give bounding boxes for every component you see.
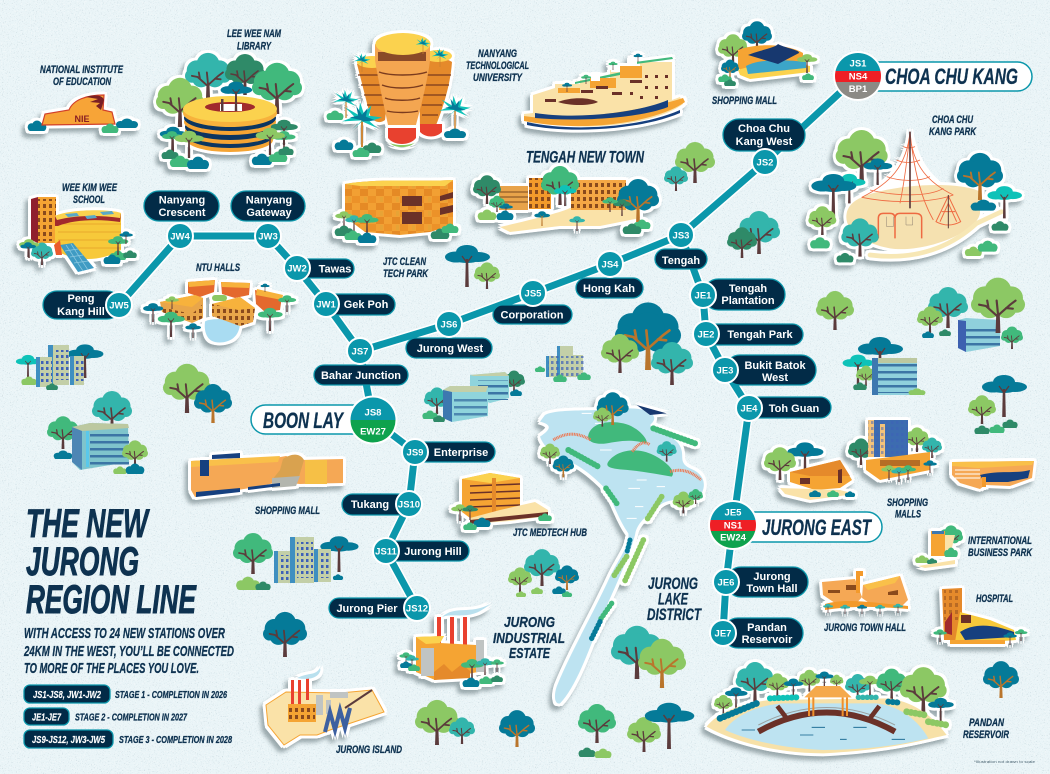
subtitle: TO MORE OF THE PLACES YOU LOVE. bbox=[24, 661, 199, 677]
station: JS9 Enterprise: Enterprise bbox=[434, 447, 488, 459]
label: JTC Clean Tech Park bbox=[383, 256, 429, 280]
building cluster: west bbox=[16, 344, 103, 390]
sticker: Wee Kim Wee School bbox=[19, 197, 137, 272]
station: JS2 Choa Chu Kang West bbox=[723, 119, 805, 175]
station: JW3 Nanyang Gateway: JW3 bbox=[258, 232, 278, 242]
legend: STAGE 2 - COMPLETION IN 2027 bbox=[75, 712, 188, 724]
station: JE2 Tengah Park: JE2 bbox=[698, 330, 714, 340]
station: JW3 Nanyang Gateway: Gateway bbox=[246, 207, 293, 219]
label: Hospital: HOSPITAL bbox=[976, 593, 1013, 605]
label: National Institute of Education: NATIONAL INSTITUTE bbox=[40, 64, 123, 76]
station: JS4 Hong Kah: JS4 bbox=[602, 260, 619, 270]
label: Nanyang Technological University: TECHNOLOGICAL bbox=[466, 60, 529, 72]
station: JS2 Choa Chu Kang West: JS2 bbox=[757, 158, 773, 168]
station: JS1 NS4 BP1 Choa Chu Kang interchange: NS4 bbox=[849, 72, 868, 82]
label: JTC MedTech Hub: JTC MEDTECH HUB bbox=[513, 527, 587, 539]
station: JE7 Pandan Reservoir bbox=[710, 618, 803, 648]
station: JS11 Jurong Hill: JS11 bbox=[375, 546, 398, 558]
station: JS9 Enterprise bbox=[402, 439, 495, 465]
sticker: Hospital bbox=[933, 588, 1027, 645]
station: JE2 Tengah Park bbox=[693, 321, 803, 347]
station: JS12 Jurong Pier bbox=[329, 595, 430, 621]
trees: west centre bbox=[163, 364, 232, 423]
station: JE4 Toh Guan: Toh Guan bbox=[769, 403, 820, 415]
station: JE3 Bukit Batok West: Bukit Batok bbox=[744, 360, 806, 372]
station: JE2 Tengah Park: Tengah Park bbox=[727, 329, 793, 341]
trees: north centre bbox=[445, 142, 780, 289]
sticker: Jurong Lake District lake bbox=[540, 392, 704, 704]
station: JS5 Corporation: JS5 bbox=[525, 288, 542, 300]
trees: large group near Tengah bbox=[601, 302, 693, 385]
station: JE1 Tengah Plantation: Plantation bbox=[721, 295, 775, 307]
building with trees: north east bbox=[917, 278, 1025, 352]
footnote: *Illustration not drawn to scale bbox=[974, 760, 1035, 764]
station: JS8 EW27 Boon Lay interchange: BOON LAY bbox=[263, 408, 345, 433]
station: JW1 Gek Poh: Gek Poh bbox=[344, 299, 389, 311]
label: Lee Wee Nam Library bbox=[227, 28, 282, 52]
legend: JS9-JS12, JW3-JW5 bbox=[32, 735, 105, 746]
label: Nanyang Technological University: NANYANG bbox=[478, 48, 517, 60]
station: JW2 Tawas bbox=[284, 255, 354, 281]
station: JW5 Peng Kang Hill: Peng bbox=[68, 293, 94, 305]
station: JW4 Nanyang Crescent: JW4 bbox=[170, 232, 190, 242]
sticker: Lee Wee Nam Library bbox=[156, 53, 302, 169]
label: NTU Halls: NTU HALLS bbox=[196, 262, 240, 274]
heading: Jurong Lake District: JURONG bbox=[648, 574, 698, 593]
station: JE3 Bukit Batok West bbox=[712, 355, 816, 385]
station: JE1 Tengah Plantation bbox=[690, 279, 785, 310]
sticker: shopping mall with tower bbox=[848, 420, 942, 482]
station: JE7 Pandan Reservoir: Reservoir bbox=[742, 634, 793, 646]
building with trees: lower west bbox=[47, 391, 148, 474]
trees: south centre bbox=[263, 612, 535, 747]
station: JW5 Peng Kang Hill bbox=[43, 291, 132, 319]
sticker: Nanyang Technological University hive bbox=[326, 33, 471, 157]
sticker: top shopping mall bbox=[718, 21, 817, 86]
heading: Jurong Lake District: DISTRICT bbox=[647, 605, 702, 624]
heading: Jurong Industrial Estate: ESTATE bbox=[509, 645, 551, 662]
sticker: International Business Park bbox=[915, 525, 963, 568]
label: Lee Wee Nam Library: LIBRARY bbox=[237, 40, 272, 52]
station: JE5 NS1 EW24 Jurong East interchange: EW24 bbox=[720, 532, 747, 544]
heading: Jurong Industrial Estate: JURONG bbox=[504, 614, 555, 631]
trees: east edge bbox=[968, 375, 1027, 434]
station: JE7 Pandan Reservoir: JE7 bbox=[715, 628, 731, 640]
station: JW2 Tawas: JW2 bbox=[287, 264, 307, 274]
label: Lee Wee Nam Library: LEE WEE NAM bbox=[227, 28, 282, 40]
station: JS10 Tukang: Tukang bbox=[351, 499, 389, 511]
label: Pandan Reservoir bbox=[963, 717, 1009, 741]
station: JE6 Jurong Town Hall: JE6 bbox=[718, 578, 734, 588]
station: JE1 Tengah Plantation: Tengah bbox=[729, 283, 767, 295]
legend: JS1-JS8, JW1-JW2 bbox=[33, 690, 101, 701]
building cluster: east of Jurong West bbox=[535, 346, 591, 382]
label: Choa Chu Kang Park: KANG PARK bbox=[929, 126, 977, 138]
station: JS2 Choa Chu Kang West: Kang West bbox=[736, 136, 793, 148]
label: JTC Clean Tech Park: JTC CLEAN bbox=[383, 256, 427, 268]
label: Wee Kim Wee School bbox=[62, 182, 117, 206]
station: JS10 Tukang bbox=[342, 491, 422, 517]
heading: Jurong Lake District bbox=[647, 574, 702, 624]
trees and building: east bbox=[816, 291, 926, 395]
station: JS1 NS4 BP1 Choa Chu Kang interchange: JS1 bbox=[850, 58, 867, 70]
label: Nanyang Technological University: UNIVERSITY bbox=[473, 72, 523, 84]
sticker: left shopping mall bbox=[191, 453, 343, 497]
sticker: Tengah New Town bbox=[473, 166, 659, 234]
label: left shopping mall: SHOPPING MALL bbox=[255, 505, 320, 517]
station: JW1 Gek Poh bbox=[313, 291, 395, 317]
title bbox=[26, 502, 197, 622]
sticker: National Institute of Education bbox=[28, 95, 138, 133]
station: JW5 Peng Kang Hill: JW5 bbox=[109, 300, 129, 312]
label: Nanyang Technological University bbox=[466, 48, 529, 84]
heading: Jurong Lake District: LAKE bbox=[658, 590, 688, 608]
sticker: JTC Clean Tech Park bbox=[335, 180, 458, 243]
label: Wee Kim Wee School: SCHOOL bbox=[73, 194, 105, 206]
rail lines bbox=[119, 76, 858, 633]
label: JTC Clean Tech Park: TECH PARK bbox=[383, 268, 429, 280]
station: JS8 EW27 Boon Lay interchange: JS8 bbox=[365, 408, 381, 418]
heading: Tengah New Town: TENGAH NEW TOWN bbox=[526, 148, 644, 166]
label: National Institute of Education bbox=[40, 64, 123, 88]
sticker: National Institute of Education: NIE bbox=[74, 114, 90, 124]
station: JS11 Jurong Hill: Jurong Hill bbox=[404, 546, 462, 558]
station: JE5 NS1 EW24 Jurong East interchange bbox=[705, 500, 882, 551]
station: JS12 Jurong Pier: Jurong Pier bbox=[336, 603, 398, 615]
subtitle bbox=[23, 626, 234, 677]
station: JE4 Toh Guan bbox=[736, 395, 831, 421]
sticker: Jurong Town Hall bbox=[822, 571, 908, 614]
station: JS10 Tukang: JS10 bbox=[398, 500, 420, 510]
legend: STAGE 1 - COMPLETION IN 2026 bbox=[115, 689, 227, 701]
station: JE4 Toh Guan: JE4 bbox=[741, 404, 758, 414]
station: JS2 Choa Chu Kang West: Choa Chu bbox=[738, 123, 790, 135]
sticker: Choa Chu Kang Park bbox=[808, 130, 1022, 262]
station: JS1 NS4 BP1 Choa Chu Kang interchange: BP1 bbox=[849, 84, 868, 95]
label: Jurong Town Hall: JURONG TOWN HALL bbox=[824, 622, 906, 634]
sticker: stepped campus building bbox=[524, 54, 685, 130]
station: JW3 Nanyang Gateway bbox=[231, 191, 305, 249]
subtitle: WITH ACCESS TO 24 NEW STATIONS OVER bbox=[24, 626, 225, 642]
station: JS5 Corporation: Corporation bbox=[501, 310, 564, 322]
station: JS5 Corporation bbox=[493, 280, 572, 324]
legend: JE1-JE7 bbox=[32, 712, 61, 724]
label: shopping malls: MALLS bbox=[895, 508, 921, 520]
station: JW5 Peng Kang Hill: Kang Hill bbox=[57, 306, 105, 318]
station: JS7 Bahar Junction: Bahar Junction bbox=[321, 370, 401, 382]
station: JS7 Bahar Junction bbox=[314, 338, 408, 385]
title: JURONG bbox=[26, 540, 139, 584]
station: JS7 Bahar Junction: JS7 bbox=[352, 346, 368, 358]
title: REGION LINE bbox=[26, 578, 197, 622]
sticker: Jurong Island bbox=[266, 668, 384, 745]
sticker: Jurong Industrial Estate bbox=[399, 604, 504, 687]
station: JW4 Nanyang Crescent: Crescent bbox=[158, 207, 206, 219]
station: JE3 Bukit Batok West: West bbox=[762, 372, 788, 384]
station: JE7 Pandan Reservoir: Pandan bbox=[747, 622, 787, 634]
station: JS11 Jurong Hill bbox=[373, 538, 469, 564]
label: shopping malls: SHOPPING bbox=[887, 497, 928, 509]
station: JS3 Tengah: Tengah bbox=[662, 255, 700, 267]
sticker: JTC MedTech Hub bbox=[451, 473, 552, 530]
legend bbox=[24, 685, 232, 748]
trees: below Jurong Lake District bbox=[578, 626, 694, 758]
title: THE NEW bbox=[26, 502, 150, 546]
station: JE5 NS1 EW24 Jurong East interchange: JURONG EAST bbox=[762, 515, 872, 540]
station: JS8 EW27 Boon Lay interchange bbox=[251, 395, 405, 445]
label: National Institute of Education: OF EDUCATION bbox=[53, 76, 112, 88]
heading: Jurong Industrial Estate bbox=[493, 614, 565, 662]
station: JW2 Tawas: Tawas bbox=[319, 264, 351, 276]
label: Wee Kim Wee School: WEE KIM WEE bbox=[62, 182, 117, 194]
tree: south east bbox=[983, 661, 1019, 698]
label: Choa Chu Kang Park bbox=[929, 114, 977, 138]
station: JS6 Jurong West bbox=[406, 311, 492, 358]
station: JS3 Tengah: JS3 bbox=[673, 230, 689, 242]
station: JS4 Hong Kah: Hong Kah bbox=[583, 283, 635, 295]
station: JW1 Gek Poh: JW1 bbox=[316, 300, 336, 310]
subtitle: 24KM IN THE WEST, YOU’LL BE CONNECTED bbox=[23, 644, 234, 660]
buildings: offices north of Enterprise bbox=[422, 370, 525, 422]
sticker: NTU Halls bbox=[143, 280, 296, 342]
station: JW4 Nanyang Crescent bbox=[144, 191, 219, 249]
label: Choa Chu Kang Park: CHOA CHU bbox=[932, 114, 974, 126]
station: JE6 Jurong Town Hall: Town Hall bbox=[746, 583, 798, 595]
label: International Business Park bbox=[968, 535, 1033, 559]
station: JE6 Jurong Town Hall bbox=[713, 567, 808, 597]
label: top shopping mall: SHOPPING MALL bbox=[712, 95, 777, 107]
station: JS6 Jurong West: JS6 bbox=[441, 320, 457, 330]
station: JW3 Nanyang Gateway: Nanyang bbox=[246, 194, 292, 206]
label: shopping malls bbox=[887, 497, 928, 520]
building cluster: south west bbox=[233, 533, 359, 590]
station: JS6 Jurong West: Jurong West bbox=[417, 343, 484, 355]
stickers: shopping malls bbox=[764, 442, 855, 500]
station: JS9 Enterprise: JS9 bbox=[407, 448, 423, 458]
station: JE5 NS1 EW24 Jurong East interchange: NS1 bbox=[724, 520, 743, 532]
station: JS1 NS4 BP1 Choa Chu Kang interchange bbox=[830, 50, 1032, 102]
station: JE6 Jurong Town Hall: Jurong bbox=[753, 571, 791, 583]
station: JE5 NS1 EW24 Jurong East interchange: JE5 bbox=[725, 508, 742, 518]
station: JS8 EW27 Boon Lay interchange: EW27 bbox=[360, 426, 386, 438]
label: Jurong Island: JURONG ISLAND bbox=[336, 744, 402, 756]
label: Pandan Reservoir: PANDAN bbox=[969, 717, 1005, 729]
label: Pandan Reservoir: RESERVOIR bbox=[963, 729, 1009, 741]
legend: STAGE 3 - COMPLETION IN 2028 bbox=[119, 734, 232, 746]
station: JW4 Nanyang Crescent: Nanyang bbox=[159, 194, 205, 206]
station: JS12 Jurong Pier: JS12 bbox=[406, 604, 428, 614]
station: JE3 Bukit Batok West: JE3 bbox=[717, 366, 733, 376]
sticker: long shopping mall bbox=[952, 461, 1034, 489]
station: JS4 Hong Kah bbox=[576, 251, 643, 298]
station: JS3 Tengah bbox=[655, 222, 707, 269]
station: JE1 Tengah Plantation: JE1 bbox=[695, 290, 712, 302]
trees: south of MedTech bbox=[508, 549, 579, 597]
heading: Jurong Industrial Estate: INDUSTRIAL bbox=[493, 630, 565, 647]
sticker: Pandan Reservoir bbox=[707, 662, 954, 753]
